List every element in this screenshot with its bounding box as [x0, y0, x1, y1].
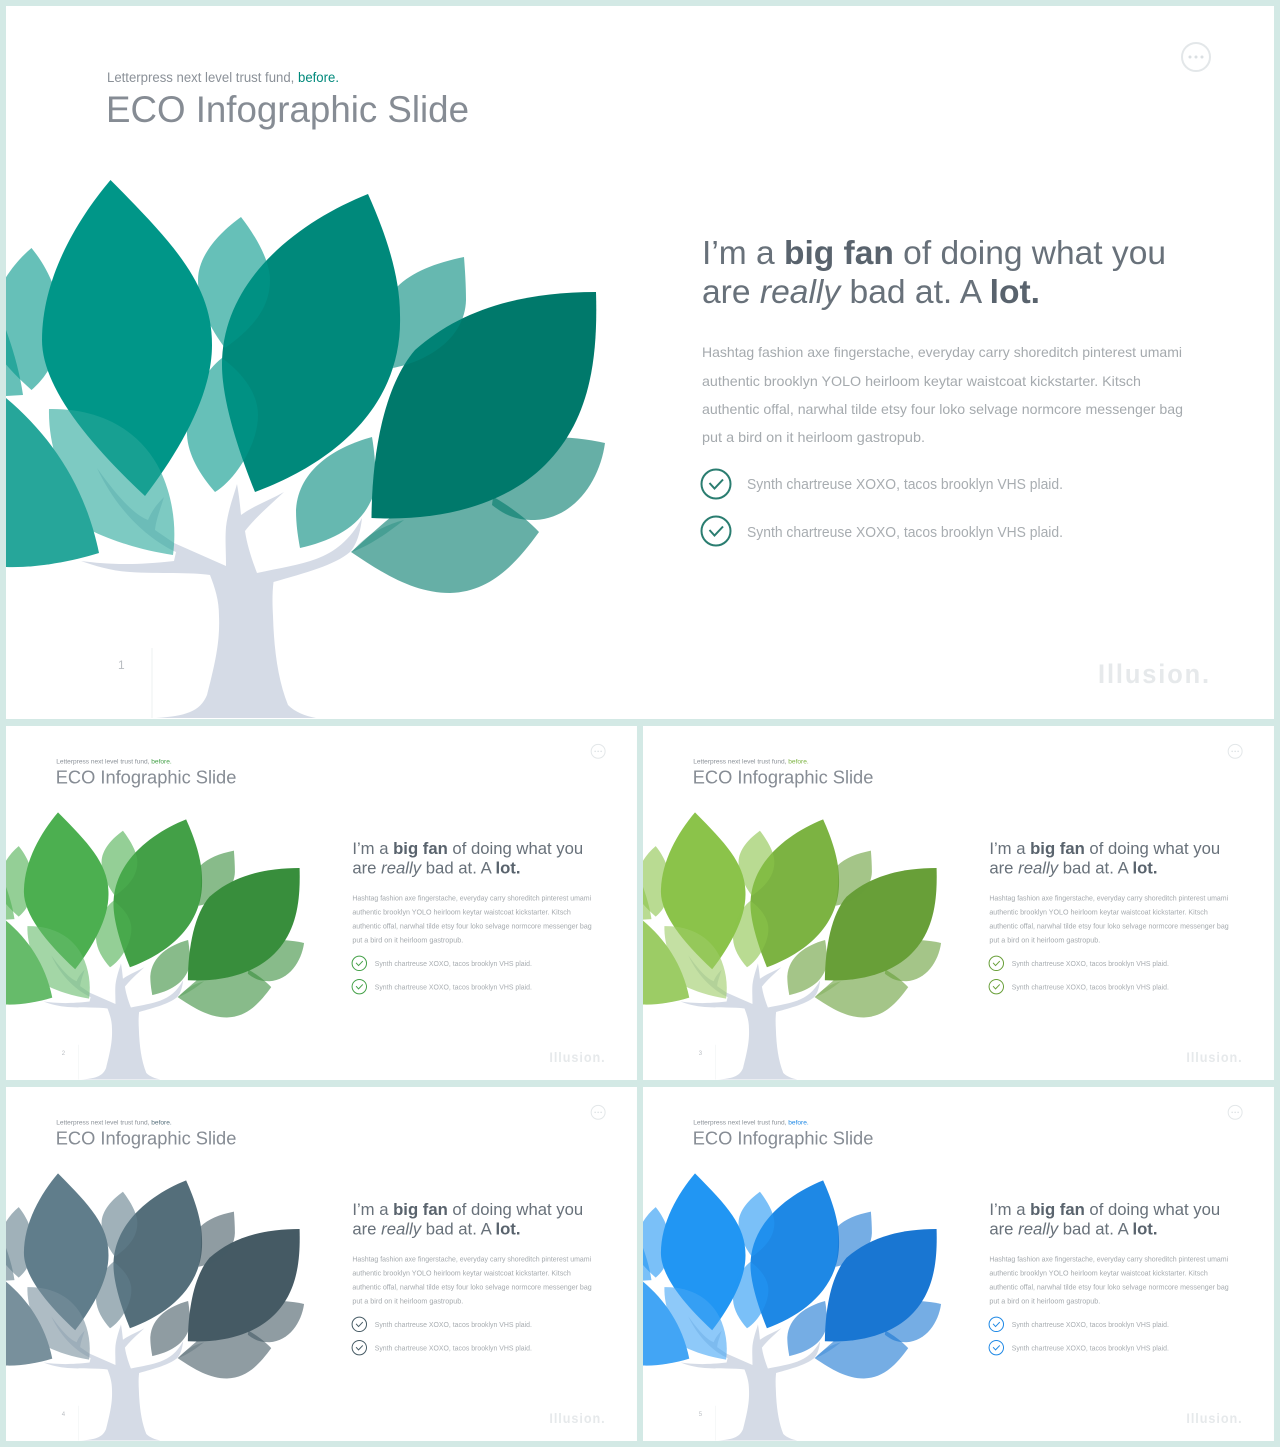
subtitle: Letterpress next level trust fund, before. — [56, 1120, 172, 1127]
title: ECO Infographic Slide — [106, 89, 469, 130]
icon: menu dots — [1228, 744, 1242, 758]
logo: Illusion. — [1186, 1050, 1243, 1065]
headline: are really bad at. A lot. — [352, 1220, 521, 1238]
headline — [352, 840, 583, 877]
checklist: Synth chartreuse XOXO, tacos brooklyn VHS plaid. — [747, 525, 1063, 541]
title: ECO Infographic Slide — [693, 1128, 873, 1149]
body text — [352, 1256, 592, 1305]
body text — [989, 1256, 1229, 1305]
headline: I’m a big fan of doing what you — [352, 840, 583, 858]
icon: menu dots — [1182, 43, 1210, 71]
headline: I’m a big fan of doing what you — [702, 234, 1166, 271]
headline: are really bad at. A lot. — [352, 859, 521, 877]
icon: menu dots — [1228, 1105, 1242, 1119]
page number: 5 — [699, 1412, 703, 1418]
body text: authentic brooklyn YOLO heirloom keytar waistcoat kickstarter. Kitsch — [352, 1271, 571, 1278]
logo: Illusion. — [549, 1411, 606, 1426]
tree illustration — [638, 812, 941, 1080]
logo: Illusion. — [549, 1050, 606, 1065]
tree illustration — [638, 1173, 941, 1441]
checklist — [352, 1317, 532, 1355]
checklist — [989, 1317, 1169, 1355]
checklist — [702, 470, 1063, 546]
panel: main teal slide — [0, 6, 1274, 719]
checklist: Synth chartreuse XOXO, tacos brooklyn VHS plaid. — [1012, 983, 1169, 992]
page number — [62, 1406, 79, 1441]
panel: blue-grey slide — [1, 1087, 637, 1441]
headline: are really bad at. A lot. — [989, 1220, 1158, 1238]
page number: 1 — [118, 658, 125, 672]
body text: authentic offal, narwhal tilde etsy four loko selvage normcore messenger bag — [989, 924, 1229, 931]
page number — [118, 648, 152, 718]
panel: blue slide — [638, 1087, 1274, 1441]
page number: 4 — [62, 1412, 66, 1418]
body text: Hashtag fashion axe fingerstache, everyday carry shoreditch pinterest umami — [989, 1256, 1229, 1263]
body text: put a bird on it heirloom gastropub. — [989, 937, 1100, 944]
headline: I’m a big fan of doing what you — [989, 1201, 1220, 1219]
body text: authentic offal, narwhal tilde etsy four loko selvage normcore messenger bag — [352, 924, 592, 931]
page number: 3 — [699, 1051, 703, 1057]
checklist: Synth chartreuse XOXO, tacos brooklyn VHS plaid. — [747, 477, 1063, 493]
title: ECO Infographic Slide — [56, 767, 236, 788]
logo: Illusion. — [1186, 1411, 1243, 1426]
subtitle: Letterpress next level trust fund, before. — [693, 759, 809, 766]
logo: Illusion. — [1098, 659, 1211, 689]
headline — [352, 1201, 583, 1238]
headline — [702, 234, 1166, 310]
icon: menu dots — [591, 1105, 605, 1119]
body text: authentic offal, narwhal tilde etsy four loko selvage normcore messenger bag — [352, 1285, 592, 1292]
body text: authentic brooklyn YOLO heirloom keytar waistcoat kickstarter. Kitsch — [989, 910, 1208, 917]
checklist: Synth chartreuse XOXO, tacos brooklyn VHS plaid. — [375, 959, 532, 968]
body text: Hashtag fashion axe fingerstache, everyday carry shoreditch pinterest umami — [702, 344, 1182, 360]
panel: green slide — [1, 726, 637, 1080]
body text: put a bird on it heirloom gastropub. — [702, 429, 925, 445]
title: ECO Infographic Slide — [56, 1128, 236, 1149]
body text: Hashtag fashion axe fingerstache, everyday carry shoreditch pinterest umami — [352, 1256, 592, 1263]
checklist: Synth chartreuse XOXO, tacos brooklyn VHS plaid. — [375, 983, 532, 992]
checklist: Synth chartreuse XOXO, tacos brooklyn VHS plaid. — [375, 1344, 532, 1353]
body text: authentic brooklyn YOLO heirloom keytar waistcoat kickstarter. Kitsch — [352, 910, 571, 917]
body text: put a bird on it heirloom gastropub. — [352, 1298, 463, 1305]
body text: authentic brooklyn YOLO heirloom keytar waistcoat kickstarter. Kitsch — [989, 1271, 1208, 1278]
body text — [352, 895, 592, 944]
checklist: Synth chartreuse XOXO, tacos brooklyn VHS plaid. — [1012, 1320, 1169, 1329]
headline: I’m a big fan of doing what you — [989, 840, 1220, 858]
subtitle: Letterpress next level trust fund, before. — [107, 70, 339, 85]
panel: light green slide — [638, 726, 1274, 1080]
checklist: Synth chartreuse XOXO, tacos brooklyn VHS plaid. — [1012, 1344, 1169, 1353]
icon: menu dots — [591, 744, 605, 758]
headline — [989, 840, 1220, 877]
checklist: Synth chartreuse XOXO, tacos brooklyn VHS plaid. — [375, 1320, 532, 1329]
tree illustration — [1, 1173, 304, 1441]
headline: are really bad at. A lot. — [702, 273, 1040, 310]
body text: put a bird on it heirloom gastropub. — [352, 937, 463, 944]
body text: Hashtag fashion axe fingerstache, everyday carry shoreditch pinterest umami — [989, 895, 1229, 902]
tree illustration — [0, 180, 605, 718]
body text: authentic brooklyn YOLO heirloom keytar waistcoat kickstarter. Kitsch — [702, 373, 1141, 389]
headline — [989, 1201, 1220, 1238]
checklist: Synth chartreuse XOXO, tacos brooklyn VHS plaid. — [1012, 959, 1169, 968]
body text: put a bird on it heirloom gastropub. — [989, 1298, 1100, 1305]
body text: authentic offal, narwhal tilde etsy four loko selvage normcore messenger bag — [702, 401, 1183, 417]
page number — [699, 1045, 716, 1080]
checklist — [989, 956, 1169, 994]
body text — [702, 344, 1183, 445]
headline: I’m a big fan of doing what you — [352, 1201, 583, 1219]
headline: are really bad at. A lot. — [989, 859, 1158, 877]
body text — [989, 895, 1229, 944]
body text: authentic offal, narwhal tilde etsy four loko selvage normcore messenger bag — [989, 1285, 1229, 1292]
title: ECO Infographic Slide — [693, 767, 873, 788]
page number — [62, 1045, 79, 1080]
page number: 2 — [62, 1051, 66, 1057]
subtitle: Letterpress next level trust fund, before. — [56, 759, 172, 766]
checklist — [352, 956, 532, 994]
body text: Hashtag fashion axe fingerstache, everyday carry shoreditch pinterest umami — [352, 895, 592, 902]
subtitle: Letterpress next level trust fund, before. — [693, 1120, 809, 1127]
page number — [699, 1406, 716, 1441]
tree illustration — [1, 812, 304, 1080]
